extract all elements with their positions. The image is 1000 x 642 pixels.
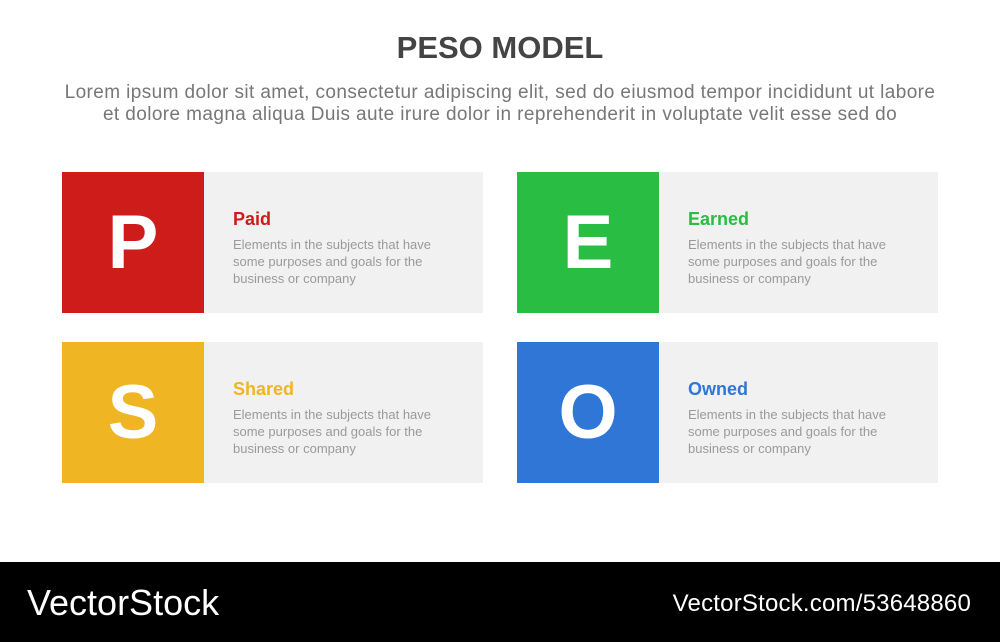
panel: paid: P	[108, 200, 158, 285]
subtitle	[65, 82, 935, 125]
panel: shared: Elements in the subjects that have some purposes and goals for the business or company	[233, 407, 431, 456]
panel: paid	[62, 172, 483, 313]
panel: earned: Elements in the subjects that have some purposes and goals for the business or company	[688, 237, 886, 286]
panel: owned: Elements in the subjects that have some purposes and goals for the business or company	[688, 407, 886, 456]
panel: owned	[517, 342, 938, 483]
panel: shared: S	[108, 370, 158, 455]
footer bar	[0, 562, 1000, 642]
panel: paid: Elements in the subjects that have some purposes and goals for the business or company	[233, 237, 431, 286]
panel: shared	[62, 342, 483, 483]
panel: earned: E	[563, 200, 613, 285]
footer logo: VectorStock	[27, 582, 219, 623]
panel: earned: Earned	[688, 209, 749, 229]
panel: earned	[517, 172, 938, 313]
subtitle: et dolore magna aliqua Duis aute irure dolor in reprehenderit in voluptate velit esse sed do	[103, 104, 897, 125]
title: PESO MODEL	[397, 30, 603, 65]
panel: owned: O	[558, 370, 618, 455]
panel: paid: Paid	[233, 209, 271, 229]
subtitle: Lorem ipsum dolor sit amet, consectetur adipiscing elit, sed do eiusmod tempor incididunt ut labore	[65, 82, 935, 103]
panel: shared: Shared	[233, 379, 294, 399]
footer url: VectorStock.com/53648860	[673, 590, 971, 617]
panel: owned: Owned	[688, 379, 748, 399]
